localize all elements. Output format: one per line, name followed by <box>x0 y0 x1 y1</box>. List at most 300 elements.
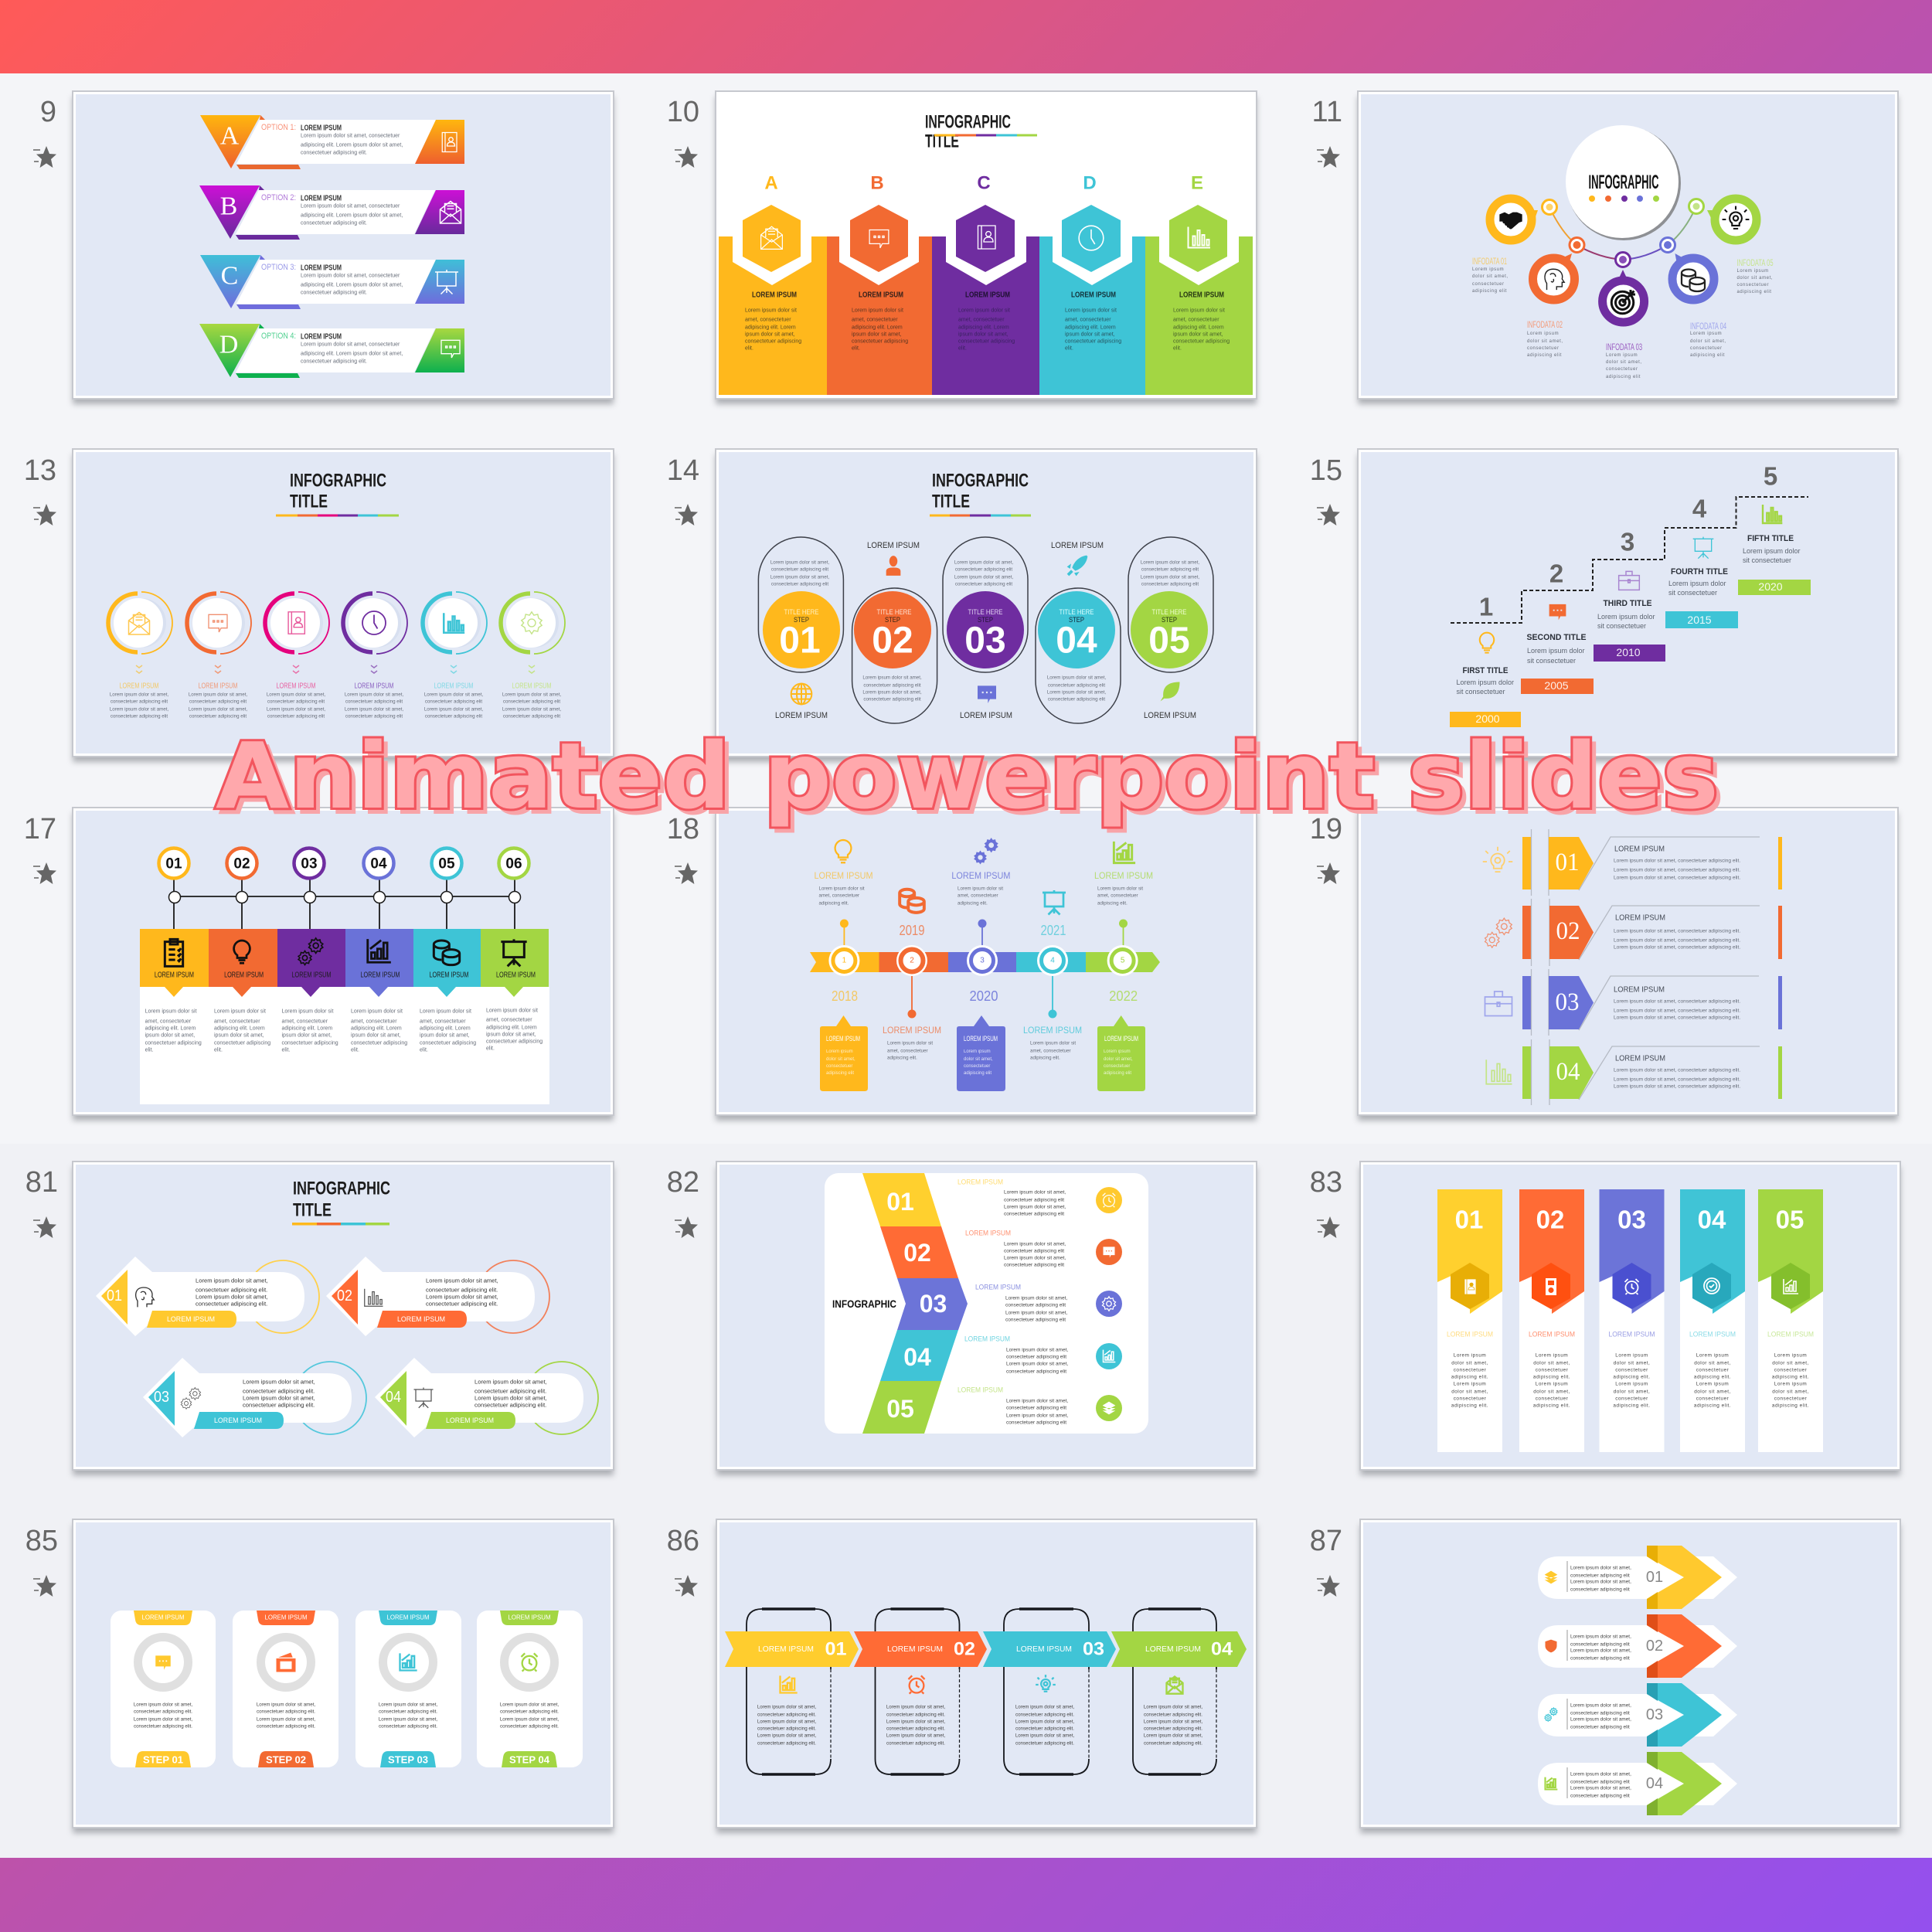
tab descriptions: ipsum dolor sit amet, <box>486 1032 536 1037</box>
ribbon numbers <box>825 1638 1233 1660</box>
step descriptions: Lorem ipsum dolor sit amet, <box>1006 1413 1068 1419</box>
timeline descriptions: Lorem ipsum dolor sit <box>819 886 865 892</box>
column 02: consectetuer <box>1536 1368 1569 1372</box>
callout green: adipiscing elit <box>1104 1071 1131 1076</box>
ring 4: Lorem ipsum dolor sit amet, <box>345 706 403 713</box>
item 04: adipiscing elit <box>1690 353 1725 358</box>
row 04: Lorem ipsum dolor sit amet, consectetuer adipiscing elit. <box>1614 1077 1740 1082</box>
column C: LOREM IPSUM <box>965 291 1010 300</box>
year boxes: 2020 <box>1758 580 1783 593</box>
row 03: Lorem ipsum dolor sit amet, consectetuer adipiscing elit. <box>1614 1008 1740 1014</box>
stair descriptions: Lorem ipsum dolor <box>1527 647 1585 655</box>
card 03: Lorem ipsum dolor sit amet, <box>379 1717 437 1722</box>
row 02: consectetuer adipiscing elit <box>1570 1655 1630 1662</box>
column descriptions: consectetuer adipiscing elit. <box>757 1726 816 1731</box>
stair descriptions: sit consectetuer <box>1668 589 1717 597</box>
row 04: Lorem ipsum dolor sit amet, consectetuer adipiscing elit. <box>1614 1083 1740 1090</box>
column descriptions: consectetuer adipiscing elit. <box>886 1740 945 1747</box>
column B: elit. <box>852 346 860 351</box>
column C: C <box>977 173 991 193</box>
row 01: Lorem ipsum dolor sit amet, consectetuer adipiscing elit. <box>1614 867 1740 873</box>
ring 1: consectetuer adipiscing elit <box>111 714 168 719</box>
heading rule <box>934 134 1037 136</box>
chevron numbers: 01 <box>886 1188 914 1216</box>
ribbon labels: LOREM IPSUM <box>887 1645 943 1654</box>
step icons <box>1096 1187 1122 1421</box>
card 01: LOREM IPSUM <box>142 1614 185 1621</box>
slide number and star labels: 19 <box>1310 813 1342 845</box>
chevron stack <box>862 1173 968 1434</box>
row 01: Lorem ipsum dolor sit amet, consectetuer adipiscing elit. <box>1614 858 1740 864</box>
stair descriptions: Lorem ipsum dolor <box>1456 679 1514 686</box>
heading: TITLE <box>293 1199 332 1221</box>
item 02: adipiscing elit <box>1527 353 1562 358</box>
timeline descriptions: amet, consectetuer <box>819 893 859 898</box>
timeline nodes: 1 <box>842 957 847 964</box>
column descriptions: consectetuer adipiscing elit. <box>1144 1713 1202 1717</box>
arrow 03: 03 <box>154 1389 169 1406</box>
stair titles: FOURTH TITLE <box>1671 567 1728 577</box>
column 03: 03 <box>1617 1206 1646 1233</box>
column 04: LOREM IPSUM <box>1689 1331 1736 1338</box>
card 04: Lorem ipsum dolor sit amet, <box>500 1717 559 1722</box>
step 05 <box>1131 560 1208 720</box>
column C: consectetuer adipiscing <box>958 338 1015 345</box>
step 02: LOREM IPSUM <box>867 541 920 550</box>
step descriptions: consectetuer adipiscing elit <box>1004 1249 1064 1253</box>
timeline ribbon <box>810 952 1160 972</box>
option D: Lorem ipsum dolor sit amet, consectetuer <box>301 342 400 348</box>
tab descriptions: amet, consectetuer <box>420 1019 466 1025</box>
tab descriptions: elit. <box>214 1048 223 1053</box>
step 05: 05 <box>1148 620 1190 662</box>
column C: Lorem ipsum dolor sit <box>958 308 1010 314</box>
arrow 01 <box>96 1257 319 1336</box>
panel: slide 10 <box>716 91 1257 404</box>
step descriptions: Lorem ipsum dolor sit amet, <box>1004 1255 1066 1261</box>
tab descriptions: ipsum dolor sit amet, <box>420 1032 470 1039</box>
column 02: 02 <box>1536 1206 1564 1233</box>
arrow 04: Lorem ipsum dolor sit amet, <box>474 1379 547 1385</box>
column E: elit. <box>1173 346 1182 351</box>
row 02 <box>1538 1614 1737 1678</box>
column A: elit. <box>745 346 753 351</box>
column B: consectetuer adipiscing <box>852 338 908 345</box>
ring 3: Lorem ipsum dolor sit amet, <box>267 706 325 713</box>
column 04: Lorem ipsum <box>1696 1352 1729 1359</box>
panel: slide 86 <box>716 1519 1257 1833</box>
column descriptions: Lorem ipsum dolor sit amet, <box>1144 1733 1202 1739</box>
column 04: dolor sit amet, <box>1694 1360 1731 1366</box>
item 01: consectetuer <box>1472 282 1505 287</box>
option C: consectetuer adipiscing elit. <box>301 291 367 295</box>
title: Animated powerpoint slides <box>216 723 1719 829</box>
tab descriptions: amet, consectetuer <box>351 1019 397 1025</box>
row 02 <box>1485 899 1782 966</box>
ring 1 <box>108 592 172 719</box>
column descriptions: Lorem ipsum dolor sit amet, <box>1015 1705 1074 1709</box>
step labels <box>957 1178 1021 1394</box>
slide number and star labels: 10 <box>667 96 699 128</box>
ring 1: LOREM IPSUM <box>119 682 159 691</box>
arrow 03: Lorem ipsum dolor sit amet, <box>243 1379 315 1385</box>
column descriptions <box>757 1705 1202 1747</box>
callout violet <box>957 1015 1005 1091</box>
column 02: consectetuer <box>1536 1396 1569 1402</box>
column 03: Lorem ipsum <box>1615 1352 1648 1359</box>
step 05: consectetuer adipiscing elit <box>1141 567 1199 572</box>
column 01: adipiscing elit. <box>1451 1403 1488 1408</box>
ring 3: Lorem ipsum dolor sit amet, <box>267 692 325 697</box>
column B: amet, consectetuer <box>852 317 898 323</box>
column 02: dolor sit amet, <box>1533 1360 1570 1366</box>
column E: E <box>1191 173 1203 193</box>
heading: TITLE <box>932 492 970 512</box>
heading <box>932 470 1029 512</box>
item 01: adipiscing elit <box>1472 289 1507 294</box>
tab labels: LOREM IPSUM <box>430 971 468 980</box>
step 04: LOREM IPSUM <box>1051 541 1104 550</box>
arrow 02: consectetuer adipiscing elit. <box>426 1286 498 1294</box>
central circle <box>1566 125 1681 240</box>
option A: OPTION 1: <box>261 123 296 132</box>
arrow 04: consectetuer adipiscing elit. <box>474 1402 546 1408</box>
card 01: Lorem ipsum dolor sit amet, <box>134 1702 192 1708</box>
ring 2: consectetuer adipiscing elit <box>189 714 247 719</box>
callout yellow: consectetuer <box>826 1064 852 1069</box>
item 02: dolor sit amet, <box>1527 339 1563 344</box>
column 03: dolor sit amet, <box>1614 1360 1650 1366</box>
column A: A <box>764 173 778 193</box>
step 03: Lorem ipsum dolor sit amet, <box>954 560 1013 566</box>
number badges <box>159 849 529 878</box>
column 01: adipiscing elit. <box>1451 1374 1488 1380</box>
option C: adipiscing elit. Lorem ipsum dolor sit amet, <box>301 283 403 287</box>
item 02: consectetuer <box>1527 346 1560 351</box>
ring 2 <box>187 592 251 719</box>
option D: adipiscing elit. Lorem ipsum dolor sit amet, <box>301 351 403 357</box>
panel: slide 19 <box>1358 808 1898 1121</box>
slide number and star labels: 81 <box>26 1166 58 1199</box>
column 01: consectetuer <box>1454 1396 1487 1402</box>
ring 6: Lorem ipsum dolor sit amet, <box>502 706 561 713</box>
item 02 <box>1527 253 1575 358</box>
column 05 <box>1758 1189 1823 1452</box>
heading: INFOGRAPHIC <box>293 1178 390 1199</box>
row 03: 03 <box>1555 988 1580 1016</box>
card 02: Lorem ipsum dolor sit amet, <box>257 1702 315 1708</box>
column B: LOREM IPSUM <box>859 291 903 300</box>
stair descriptions: sit consectetuer <box>1743 556 1791 564</box>
chevron numbers: 04 <box>903 1343 931 1371</box>
ring 4: consectetuer adipiscing elit <box>345 699 403 705</box>
stair descriptions: Lorem ipsum dolor <box>1668 580 1726 587</box>
column 01: Lorem ipsum <box>1454 1382 1486 1386</box>
ring 3: consectetuer adipiscing elit <box>267 714 325 719</box>
column E: adipiscing elit. Lorem <box>1173 325 1224 331</box>
timeline descriptions: Lorem ipsum dolor sit <box>887 1040 933 1046</box>
panel: slide 18 <box>716 808 1257 1121</box>
panel: slide 13 <box>73 449 614 762</box>
column 01: consectetuer <box>1454 1368 1487 1372</box>
row 04: Lorem ipsum dolor sit amet, <box>1570 1771 1631 1777</box>
step 03: Lorem ipsum dolor sit amet, <box>954 575 1013 580</box>
tab icons <box>165 938 527 966</box>
column 02: LOREM IPSUM <box>1529 1331 1575 1338</box>
row 01: LOREM IPSUM <box>1614 845 1665 853</box>
step 04: STEP <box>1069 616 1084 624</box>
row 04: consectetuer adipiscing elit <box>1570 1793 1630 1799</box>
ring 1: Lorem ipsum dolor sit amet, <box>110 692 168 697</box>
tab descriptions: ipsum dolor sit amet, <box>281 1032 332 1039</box>
item 01: INFODATA 01 <box>1472 256 1507 267</box>
slide number and star labels: 82 <box>667 1166 699 1199</box>
column 04 <box>1680 1189 1745 1452</box>
timeline descriptions: Lorem ipsum dolor sit <box>1030 1040 1076 1046</box>
timeline descriptions: amet, consectetuer <box>1030 1048 1071 1054</box>
step 05: TITLE HERE <box>1151 608 1187 616</box>
column 03: LOREM IPSUM <box>1609 1331 1655 1338</box>
option D: LOREM IPSUM <box>301 332 342 342</box>
column 05: consectetuer <box>1774 1396 1808 1402</box>
ring 6: Lorem ipsum dolor sit amet, <box>502 692 561 697</box>
callout violet: consectetuer <box>964 1064 990 1069</box>
row 01: consectetuer adipiscing elit <box>1570 1573 1630 1578</box>
ring 5: consectetuer adipiscing elit <box>425 714 482 719</box>
option B: OPTION 2: <box>261 193 296 202</box>
row 04: 04 <box>1556 1058 1580 1086</box>
callout yellow <box>820 1015 868 1091</box>
white text area <box>140 987 549 1104</box>
tab descriptions: adipiscing elit. Lorem <box>351 1026 402 1031</box>
item 05: Lorem ipsum <box>1737 269 1769 274</box>
column D: Lorem ipsum dolor sit <box>1065 308 1117 314</box>
connector curve <box>1549 206 1696 260</box>
timeline nodes: 3 <box>980 957 985 964</box>
tab descriptions: Lorem ipsum dolor sit <box>214 1009 266 1014</box>
step descriptions: Lorem ipsum dolor sit amet, <box>1004 1190 1066 1195</box>
arrow 04: 04 <box>386 1389 401 1406</box>
heading rule <box>292 1223 389 1226</box>
connector nodes <box>168 892 521 903</box>
option A <box>200 115 464 169</box>
row 04: 04 <box>1646 1775 1663 1792</box>
row 03: consectetuer adipiscing elit <box>1570 1725 1630 1730</box>
arrow 04 <box>375 1358 598 1437</box>
column 01 <box>1437 1189 1502 1452</box>
column D: elit. <box>1065 346 1073 351</box>
year labels: 2018 <box>832 988 858 1004</box>
callout yellow: dolor sit amet, <box>826 1057 855 1062</box>
row 03: Lorem ipsum dolor sit amet, consectetuer adipiscing elit. <box>1614 998 1740 1005</box>
column C: ipsum dolor sit amet, <box>958 332 1009 337</box>
step 04: Lorem ipsum dolor sit amet, <box>1047 675 1106 680</box>
column C <box>932 173 1039 395</box>
column 03 <box>1600 1189 1665 1452</box>
item 05: consectetuer <box>1737 283 1769 287</box>
card 04: STEP 04 <box>509 1754 550 1765</box>
year labels: 2022 <box>1109 988 1138 1004</box>
timeline descriptions: adipiscing elit. <box>957 901 988 906</box>
stair titles: FIFTH TITLE <box>1747 534 1794 543</box>
item 05: dolor sit amet, <box>1737 276 1773 281</box>
tab descriptions: ipsum dolor sit amet, <box>351 1032 401 1039</box>
row 04: Lorem ipsum dolor sit amet, <box>1570 1785 1631 1791</box>
ring 5: consectetuer adipiscing elit <box>425 699 482 705</box>
row 01 <box>1538 1546 1737 1609</box>
row 03: Lorem ipsum dolor sit amet, consectetuer adipiscing elit. <box>1614 1015 1740 1020</box>
option D: D <box>219 331 238 359</box>
stair titles <box>1462 534 1794 675</box>
tab labels: LOREM IPSUM <box>224 971 264 980</box>
card 02: Lorem ipsum dolor sit amet, <box>257 1717 315 1722</box>
card 04: LOREM IPSUM <box>509 1614 551 1621</box>
tab descriptions: elit. <box>351 1048 359 1053</box>
item 03: INFODATA 03 <box>1606 342 1642 352</box>
row 02: Lorem ipsum dolor sit amet, consectetuer adipiscing elit. <box>1614 929 1740 934</box>
heading <box>290 470 386 512</box>
step 05: STEP <box>1162 616 1177 624</box>
year labels: 2019 <box>900 923 924 938</box>
year labels <box>832 923 1138 1004</box>
panel: slide 14 <box>716 449 1257 762</box>
panel: slide 87 <box>1360 1519 1900 1833</box>
card 02 <box>233 1611 338 1767</box>
tab descriptions: ipsum dolor sit amet, <box>214 1032 264 1039</box>
column 03: adipiscing elit. <box>1613 1403 1651 1408</box>
callout violet: LOREM IPSUM <box>964 1035 998 1043</box>
column descriptions: Lorem ipsum dolor sit amet, <box>757 1733 816 1739</box>
chevron numbers: 02 <box>903 1239 931 1267</box>
column 04: dolor sit amet, <box>1694 1389 1731 1394</box>
tab descriptions: adipiscing elit. Lorem <box>486 1025 537 1031</box>
column B: Lorem ipsum dolor sit <box>852 308 903 314</box>
ribbon labels <box>758 1645 1201 1654</box>
row 02: Lorem ipsum dolor sit amet, consectetuer adipiscing elit. <box>1614 938 1740 943</box>
column descriptions: Lorem ipsum dolor sit amet, <box>757 1705 816 1709</box>
ribbon labels: LOREM IPSUM <box>1145 1645 1201 1654</box>
card 03: consectetuer adipiscing elit. <box>379 1723 437 1730</box>
column E: LOREM IPSUM <box>1179 291 1224 300</box>
item 05: INFODATA 05 <box>1737 257 1774 268</box>
ribbon labels: LOREM IPSUM <box>758 1645 814 1654</box>
slide number and star labels: 83 <box>1310 1166 1342 1199</box>
arrow 02: Lorem ipsum dolor sit amet, <box>426 1294 498 1300</box>
tab descriptions: consectetuer adipiscing <box>145 1040 202 1046</box>
step 01 <box>763 560 840 720</box>
item 04: dolor sit amet, <box>1690 339 1726 344</box>
callout violet: dolor sit amet, <box>964 1057 993 1062</box>
option A: LOREM IPSUM <box>301 124 342 133</box>
heading <box>925 111 1011 151</box>
ribbon numbers: 03 <box>1083 1638 1104 1660</box>
callout green <box>1097 1015 1145 1091</box>
column 05: 05 <box>1776 1206 1804 1233</box>
step 04 <box>1038 541 1115 702</box>
slide number and star labels: 15 <box>1310 454 1342 487</box>
option B: adipiscing elit. Lorem ipsum dolor sit amet, <box>301 213 403 218</box>
column 04: adipiscing elit. <box>1694 1403 1731 1408</box>
callout yellow: adipiscing elit <box>826 1071 854 1076</box>
step 02: consectetuer adipiscing elit <box>863 683 921 688</box>
step 02 <box>854 541 931 702</box>
option A: Lorem ipsum dolor sit amet, consectetuer <box>301 133 400 139</box>
option B: B <box>220 192 237 221</box>
ring 2: consectetuer adipiscing elit <box>189 699 247 705</box>
step 02: 02 <box>872 620 913 662</box>
callout green: consectetuer <box>1104 1064 1130 1069</box>
column 02 <box>1519 1189 1584 1452</box>
stair numbers <box>1479 462 1777 621</box>
column 02: Lorem ipsum <box>1536 1352 1568 1359</box>
stair numbers: 1 <box>1479 592 1493 621</box>
ring 4: LOREM IPSUM <box>354 682 394 691</box>
option B: Lorem ipsum dolor sit amet, consectetuer <box>301 204 400 209</box>
tab descriptions: consectetuer adipiscing <box>486 1039 543 1045</box>
step labels: LOREM IPSUM <box>957 1386 1003 1394</box>
step 01: LOREM IPSUM <box>775 711 828 720</box>
card 01 <box>111 1611 216 1767</box>
column E <box>1145 173 1253 395</box>
step 05: Lorem ipsum dolor sit amet, <box>1141 575 1199 580</box>
tab descriptions: adipiscing elit. Lorem <box>145 1026 196 1031</box>
tab descriptions: amet, consectetuer <box>145 1019 192 1025</box>
stair descriptions: sit consectetuer <box>1527 657 1576 665</box>
item 05: adipiscing elit <box>1737 290 1772 294</box>
badge numbers: 06 <box>505 856 522 872</box>
ring 4: Lorem ipsum dolor sit amet, <box>345 692 403 697</box>
column descriptions: consectetuer adipiscing elit. <box>757 1740 816 1747</box>
column descriptions: consectetuer adipiscing elit. <box>886 1713 945 1717</box>
badge numbers <box>165 856 522 872</box>
column 05: Lorem ipsum <box>1774 1382 1807 1386</box>
callout yellow: Lorem ipsum <box>826 1049 853 1054</box>
stair icons <box>1480 505 1782 653</box>
column 02: adipiscing elit. <box>1533 1403 1570 1408</box>
row 01: Lorem ipsum dolor sit amet, consectetuer adipiscing elit. <box>1614 875 1740 881</box>
year boxes: 2000 <box>1475 713 1500 725</box>
lower page background <box>0 1144 1932 1859</box>
column A: LOREM IPSUM <box>752 291 797 300</box>
stair titles: FIRST TITLE <box>1462 666 1509 675</box>
card 03: consectetuer adipiscing elit. <box>379 1709 437 1714</box>
callout violet: Lorem ipsum <box>964 1049 991 1054</box>
colored tabs <box>140 929 549 997</box>
timeline headings: LOREM IPSUM <box>883 1025 941 1036</box>
column 05: dolor sit amet, <box>1772 1389 1809 1394</box>
step descriptions: consectetuer adipiscing elit <box>1004 1263 1064 1267</box>
tab descriptions: elit. <box>145 1048 154 1053</box>
step descriptions: Lorem ipsum dolor sit amet, <box>1004 1241 1066 1247</box>
ribbon numbers: 04 <box>1211 1638 1233 1660</box>
column D <box>1039 173 1145 395</box>
column descriptions: Lorem ipsum dolor sit amet, <box>1015 1733 1074 1739</box>
ribbon numbers: 01 <box>825 1638 847 1660</box>
column D: adipiscing elit. Lorem <box>1065 325 1116 331</box>
row 03: 03 <box>1646 1706 1663 1723</box>
column descriptions: Lorem ipsum dolor sit amet, <box>886 1705 945 1709</box>
column descriptions: Lorem ipsum dolor sit amet, <box>1144 1719 1202 1725</box>
tab labels <box>155 971 536 980</box>
timeline stems <box>840 920 1128 1019</box>
row 01: 01 <box>1646 1569 1663 1586</box>
row 02: LOREM IPSUM <box>1615 913 1665 923</box>
column 03: consectetuer <box>1615 1368 1648 1372</box>
step 02: Lorem ipsum dolor sit amet, <box>862 675 922 680</box>
heading: INFOGRAPHIC <box>290 470 386 492</box>
callout green: dolor sit amet, <box>1104 1057 1133 1062</box>
tab labels: LOREM IPSUM <box>360 971 400 980</box>
